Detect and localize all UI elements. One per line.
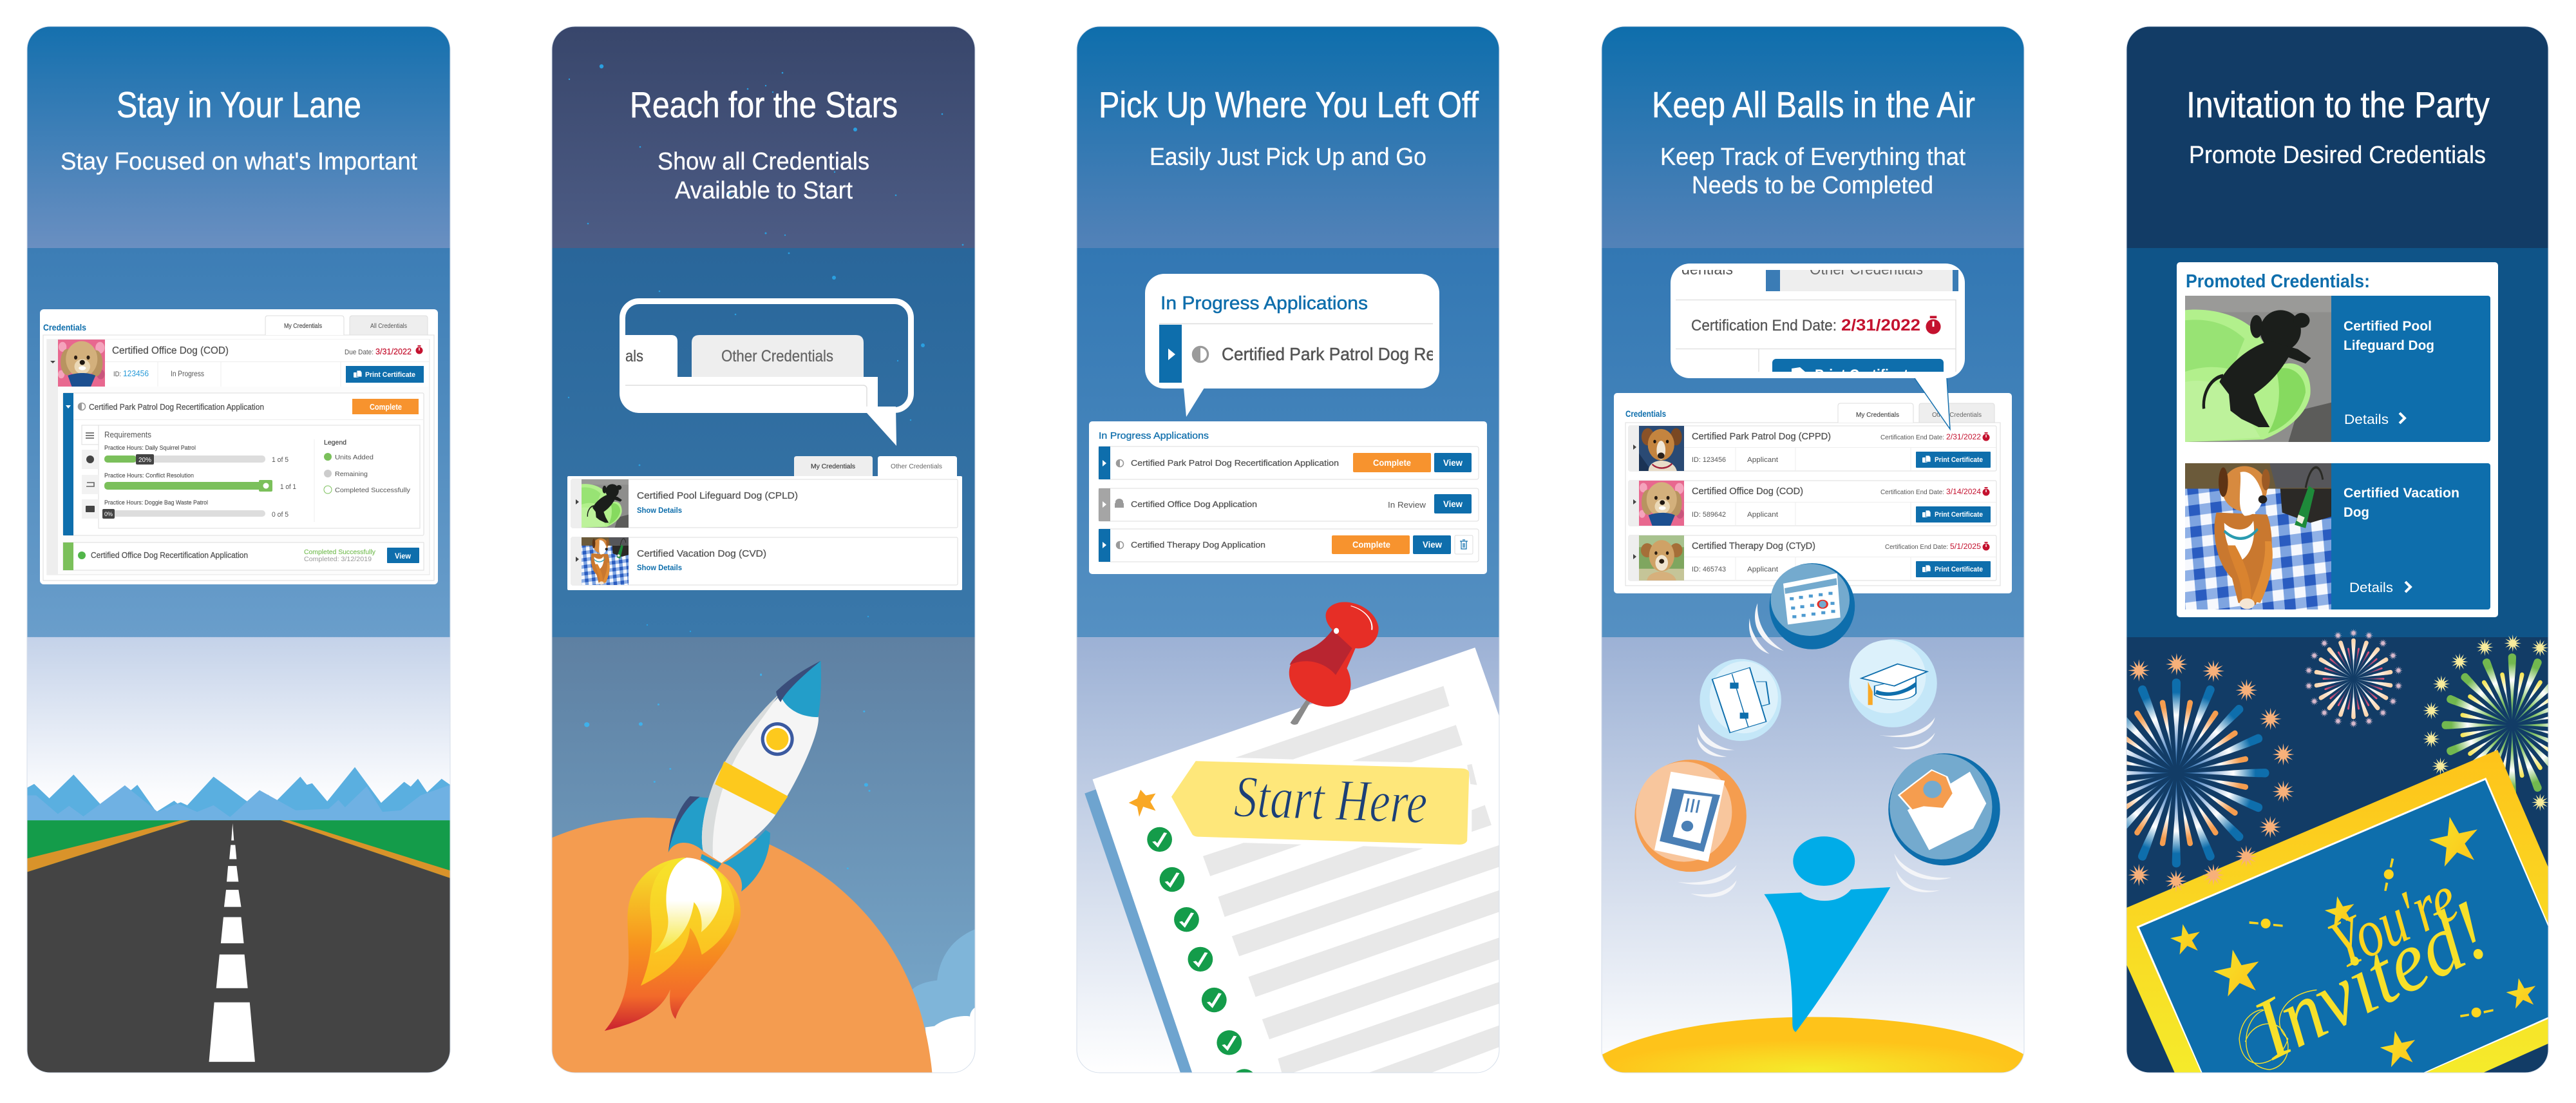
row: therapy dog: Certified Therapy Dog Application xyxy=(1131,540,1265,550)
speech bubble: magnified end date: dentials xyxy=(1681,261,1733,278)
row: therapy dog: Complete xyxy=(1352,540,1390,550)
illustration: fireworks and invitation xyxy=(2083,629,2576,1078)
promo: vacation dog: Dog xyxy=(2344,505,2369,520)
subheading xyxy=(658,148,869,204)
sky xyxy=(27,637,450,781)
credentials card: Credentials xyxy=(1625,408,1666,419)
middle band xyxy=(27,248,450,637)
person xyxy=(1764,836,1890,1032)
invited swash xyxy=(2239,990,2316,1069)
row: office dog: In Review xyxy=(1388,500,1426,510)
middle band xyxy=(2126,248,2548,637)
row: vacation dog: Certified Vacation Dog (CVD) xyxy=(637,548,766,559)
tab: my credentials xyxy=(794,456,873,476)
tab: my credentials: My Credentials xyxy=(811,463,855,470)
application section with requirements: 1 of 5 xyxy=(272,456,289,464)
star icon xyxy=(1129,790,1155,817)
speech bubble: magnified application: In Progress Applications xyxy=(1160,293,1368,314)
completed application row: Certified Office Dog Recertification Application xyxy=(91,550,248,560)
front mountains xyxy=(27,785,450,820)
row: pool lifeguard: Show Details xyxy=(637,507,682,515)
tab: my credentials: My Credentials xyxy=(1856,412,1899,419)
application section with requirements: 0% xyxy=(104,511,113,517)
invitation frame xyxy=(2124,750,2552,1076)
tab: other credentials: Other Credentials xyxy=(1932,412,1982,419)
lower band xyxy=(2126,637,2548,1073)
row: therapy dog: Certified Therapy Dog (CTyD) xyxy=(1692,541,1815,552)
firework stars: orange xyxy=(2128,653,2294,892)
row: vacation dog: Show Details xyxy=(637,564,682,572)
blue cloud xyxy=(910,929,975,1031)
left shoulder xyxy=(27,820,191,872)
invitation stars xyxy=(2168,812,2539,1068)
application section with requirements: 1 of 1 xyxy=(280,483,296,491)
application section with requirements: Complete xyxy=(370,402,402,412)
start here script: Start Here xyxy=(1233,763,1428,836)
heading: Pick Up Where You Left Off xyxy=(1099,84,1479,126)
application section with requirements: Requirements xyxy=(104,430,151,439)
card title: Credentials xyxy=(43,322,86,332)
row: office dog: Certified Office Dog Application xyxy=(1131,499,1257,509)
planet xyxy=(552,818,933,1077)
row: park patrol xyxy=(1099,446,1479,479)
panel: Pick Up Where You Left Off xyxy=(1077,26,1500,1094)
flame xyxy=(605,858,741,1031)
heading: Invitation to the Party xyxy=(2186,84,2490,126)
legend: Units Added xyxy=(335,454,374,461)
header band xyxy=(1077,26,1499,248)
firework: blue xyxy=(2083,678,2269,867)
row: office dog: 3/14/2024 xyxy=(1946,488,1982,496)
legend: Remaining xyxy=(335,471,368,478)
row: therapy dog xyxy=(1629,535,1996,580)
speech bubble: magnified end date: Print Certificate xyxy=(1815,367,1916,384)
speech bubble: magnified tabs: als xyxy=(625,347,643,365)
completed application row: Completed: 3/12/2019 xyxy=(304,556,372,563)
promo: pool lifeguard: Details xyxy=(2344,412,2389,427)
credential header row: 3/31/2022 xyxy=(375,347,412,356)
credential header row xyxy=(47,340,430,575)
application section with requirements xyxy=(63,393,424,535)
subheading: Needs to be Completed xyxy=(1692,172,1933,199)
row: office dog: ID: 589642 xyxy=(1692,511,1726,519)
row: park patrol dog: ID: 123456 xyxy=(1692,456,1726,464)
row: therapy dog: Applicant xyxy=(1747,566,1778,573)
panel: Keep All Balls in the Air xyxy=(1602,26,2024,1075)
tab: other credentials xyxy=(1919,403,1994,423)
legend: Completed Successfully xyxy=(335,487,410,494)
legend xyxy=(324,439,410,494)
subheading: Promote Desired Credentials xyxy=(2189,142,2486,169)
you're: You're xyxy=(2318,860,2468,983)
firework: cream xyxy=(2299,629,2403,734)
subheading: Available to Start xyxy=(675,177,853,204)
speech bubble: magnified end date: 2/31/2022 xyxy=(1841,316,1920,334)
row: pool lifeguard: Certified Pool Lifeguard Dog (CPLD) xyxy=(637,490,798,501)
row: park patrol dog: Certification End Date: xyxy=(1880,434,1944,441)
header band xyxy=(2126,26,2548,248)
heading: Reach for the Stars xyxy=(630,84,898,126)
middle band xyxy=(552,248,975,637)
start here tag xyxy=(1171,761,1469,845)
row: office dog xyxy=(1099,488,1479,521)
credential header row: In Progress xyxy=(171,369,204,378)
row: park patrol dog: Applicant xyxy=(1747,456,1778,464)
application section with requirements: Practice Hours: Conflict Resolution xyxy=(104,472,194,479)
header band xyxy=(1602,26,2024,248)
tab: all credentials xyxy=(350,316,428,335)
illustration: rocket launch xyxy=(552,637,975,1079)
row: vacation dog xyxy=(571,537,958,585)
credentials card xyxy=(1614,393,2012,593)
white cloud xyxy=(925,1008,975,1077)
application section with requirements: 0 of 5 xyxy=(272,511,289,519)
paper text lines xyxy=(1203,686,1499,1075)
completed application row: Completed Successfully xyxy=(304,549,375,556)
rocket xyxy=(668,661,821,892)
road xyxy=(27,820,450,1077)
row: park patrol: Complete xyxy=(1373,458,1411,468)
back mountains xyxy=(27,767,450,820)
check marks xyxy=(1147,827,1257,1094)
row: office dog: Print Certificate xyxy=(1935,511,1983,519)
subheading: Show all Credentials xyxy=(658,148,869,175)
motion swooshes xyxy=(1678,603,1951,897)
invitation ornaments xyxy=(2249,858,2494,1017)
header band xyxy=(552,26,975,248)
grass xyxy=(27,820,450,878)
panel: Stay in Your Lane xyxy=(27,26,450,1077)
row: therapy dog: View xyxy=(1423,540,1442,550)
row: park patrol dog: Certified Park Patrol Dog (CPPD) xyxy=(1692,432,1831,442)
speech bubble: magnified end date: Certification End Date: xyxy=(1691,317,1837,334)
illustration: road and mountains xyxy=(27,637,450,1077)
heading: Keep All Balls in the Air xyxy=(1652,84,1975,126)
row: therapy dog: Certification End Date: xyxy=(1885,544,1948,551)
ball: tablet xyxy=(1634,760,1747,872)
promo: pool lifeguard xyxy=(2185,296,2490,442)
tab: my credentials xyxy=(265,316,344,335)
lane dashes xyxy=(209,823,255,1062)
tab: all credentials: All Credentials xyxy=(370,323,407,330)
ball: graduation cap xyxy=(1849,639,1937,727)
star dots xyxy=(568,64,963,632)
row: park patrol: View xyxy=(1443,458,1463,468)
middle band xyxy=(1077,248,1499,637)
application section with requirements: Certified Park Patrol Dog Recertification Application xyxy=(89,402,264,412)
in progress applications card xyxy=(1089,421,1487,574)
push pin xyxy=(1289,602,1379,725)
row: therapy dog: ID: 465743 xyxy=(1692,566,1726,573)
firework: green xyxy=(2423,635,2576,811)
legend: Legend xyxy=(324,439,346,446)
invited: Invited! xyxy=(2239,881,2502,1078)
panel: Invitation to the Party xyxy=(2083,26,2576,1078)
speech bubble: magnified end date: Other Credentials xyxy=(1810,261,1923,278)
completed application row: View xyxy=(395,552,412,561)
platform xyxy=(1602,1017,2024,1075)
completed application row xyxy=(63,542,424,570)
invitation white keyline xyxy=(2137,778,2552,1076)
row: park patrol dog: Print Certificate xyxy=(1935,456,1983,464)
sky star dots xyxy=(584,673,871,869)
row: park patrol dog xyxy=(1629,426,1996,471)
right shoulder xyxy=(281,820,450,878)
subheading: Easily Just Pick Up and Go xyxy=(1150,144,1426,171)
middle band xyxy=(1602,248,2024,637)
application section with requirements: Practice Hours: Doggie Bag Waste Patrol xyxy=(104,499,208,506)
promo: pool lifeguard: Certified Pool xyxy=(2344,319,2432,334)
promo: vacation dog: Certified Vacation xyxy=(2344,486,2459,501)
illustration: start-here checklist xyxy=(1077,602,1500,1094)
tab: my credentials xyxy=(1838,403,1913,423)
row: office dog: Applicant xyxy=(1747,511,1778,519)
row: pool lifeguard xyxy=(571,479,958,528)
subheading: Stay Focused on what's Important xyxy=(61,148,417,175)
subheading: Keep Track of Everything that xyxy=(1660,144,1965,171)
illustration: juggler xyxy=(1602,563,2024,1075)
invitation blue field xyxy=(2139,780,2552,1076)
row: therapy dog: Print Certificate xyxy=(1935,566,1983,573)
paper shadow xyxy=(1084,789,1193,1075)
row: office dog: Certified Office Dog (COD) xyxy=(1692,486,1803,497)
speech bubble: magnified application xyxy=(1145,274,1439,417)
ball: briefcase xyxy=(1700,659,1781,741)
speech bubble: magnified tabs: Other Credentials xyxy=(721,347,833,365)
header band xyxy=(27,26,450,248)
credential header row: Print Certificate xyxy=(365,371,415,379)
promoted credentials card xyxy=(2177,262,2498,617)
credential header row: Due Date: xyxy=(345,349,374,356)
lower band xyxy=(1602,637,2024,1073)
credentials card xyxy=(567,456,962,590)
speech bubble: magnified tabs xyxy=(622,302,911,446)
credential header row: Certified Office Dog (COD) xyxy=(112,345,229,356)
heading: Stay in Your Lane xyxy=(117,84,361,126)
tab: other credentials xyxy=(878,456,957,476)
panel: Reach for the Stars xyxy=(552,26,975,1079)
tab: my credentials: My Credentials xyxy=(284,323,322,330)
application section with requirements: 20% xyxy=(138,457,151,464)
application section with requirements: Practice Hours: Daily Squirrel Patrol xyxy=(104,445,196,451)
lower background xyxy=(1077,637,1500,1075)
ball: certificate xyxy=(1888,753,2000,865)
tab: other credentials: Other Credentials xyxy=(891,463,942,470)
row: office dog: Certification End Date: xyxy=(1880,489,1944,496)
promo: vacation dog: Details xyxy=(2349,580,2393,595)
row: park patrol dog: 2/31/2022 xyxy=(1946,434,1981,441)
row: office dog xyxy=(1629,481,1996,526)
subheading xyxy=(1660,144,1965,199)
speech bubble: magnified end date xyxy=(1671,261,1965,429)
credential header row: ID: xyxy=(113,370,121,378)
credentials card xyxy=(40,309,438,584)
row: office dog: View xyxy=(1443,499,1463,509)
in progress applications card: In Progress Applications xyxy=(1099,430,1209,441)
sky xyxy=(552,637,975,1079)
promo: pool lifeguard: Lifeguard Dog xyxy=(2344,338,2434,353)
paper xyxy=(1093,647,1499,1075)
promoted credentials card: Promoted Credentials: xyxy=(2186,271,2370,292)
promo: vacation dog xyxy=(2185,463,2490,609)
row: therapy dog: 5/1/2025 xyxy=(1950,543,1981,551)
speech bubble: magnified application: Certified Park Patrol Dog Re xyxy=(1222,344,1435,364)
row: park patrol: Certified Park Patrol Dog Recertification Application xyxy=(1131,458,1339,468)
row: therapy dog xyxy=(1099,529,1479,562)
credential header row: 123456 xyxy=(123,369,149,378)
ball: calendar xyxy=(1770,563,1855,649)
